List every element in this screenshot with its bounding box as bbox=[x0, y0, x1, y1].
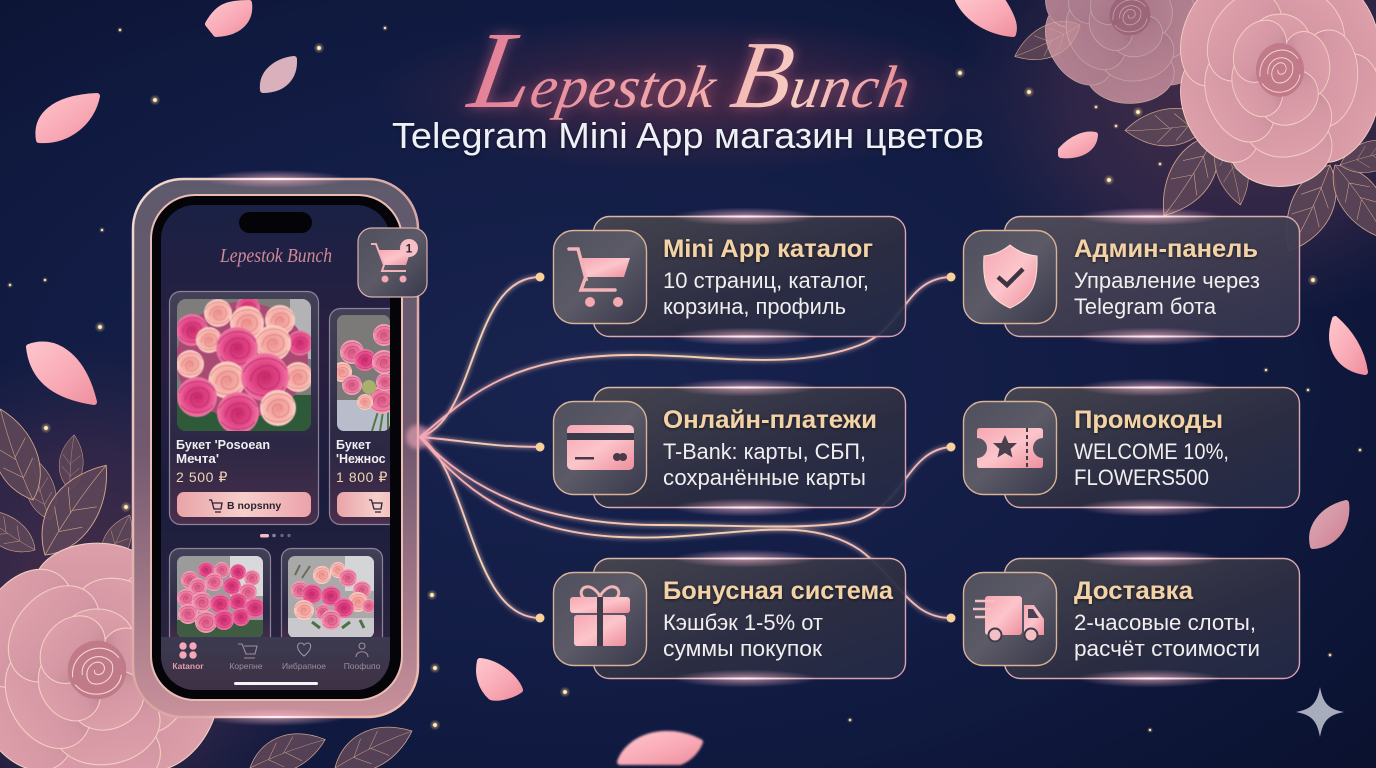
card: online payments bbox=[554, 378, 906, 516]
connector: promo codes bbox=[420, 437, 951, 527]
heading: Доставка bbox=[1074, 577, 1194, 605]
product card 2 bbox=[328, 308, 390, 526]
tab: profile: Поофuпо bbox=[344, 661, 381, 671]
bottom tab bar bbox=[161, 637, 390, 690]
product card 4 bbox=[282, 548, 382, 648]
subtitle: Telegram Mini App магазин цветов bbox=[392, 115, 984, 156]
phone body bbox=[151, 195, 402, 700]
tab: catalog: Кatanor bbox=[172, 661, 204, 671]
icon: delivery truck bbox=[973, 596, 1044, 642]
tab: profile bbox=[344, 643, 381, 671]
icon tile bbox=[964, 402, 1056, 494]
connectors bbox=[420, 277, 951, 618]
floating cart badge bbox=[358, 228, 427, 297]
connector: bonus system bbox=[420, 437, 540, 618]
product price 2: 1 800 ₽ bbox=[336, 469, 388, 485]
icon: cart bbox=[569, 249, 630, 307]
card: promo codes: FLOWERS500 bbox=[1074, 465, 1209, 490]
card: promo codes bbox=[964, 378, 1300, 516]
icon tile bbox=[964, 572, 1056, 666]
card: Mini App catalog bbox=[554, 208, 906, 346]
add to cart button 1: В nopsnny bbox=[227, 500, 281, 512]
card: delivery bbox=[964, 550, 1300, 688]
card: admin panel bbox=[964, 208, 1300, 346]
icon tile bbox=[554, 230, 646, 324]
card: bonus system bbox=[554, 550, 906, 688]
icon: ticket bbox=[977, 428, 1043, 468]
description: Кэшбэк 1-5% от bbox=[663, 610, 823, 635]
add to cart button 1 bbox=[177, 492, 311, 517]
app logo: Lepestok Bunch bbox=[219, 245, 332, 267]
product card 3 bbox=[170, 548, 270, 648]
icon: shield bbox=[984, 245, 1037, 308]
bouquet photo 1 bbox=[176, 296, 313, 434]
connector: Mini App catalog bbox=[420, 277, 540, 437]
phone glass frame bbox=[133, 179, 418, 717]
phone frame glows bbox=[203, 170, 347, 726]
heading: Онлайн-платежи bbox=[663, 406, 877, 434]
card: online payments: сохранённые карты bbox=[663, 465, 866, 490]
tab: cart bbox=[229, 644, 263, 671]
product price 1: 2 500 ₽ bbox=[176, 469, 228, 485]
connector: delivery bbox=[420, 437, 951, 618]
description: 2-часовые слоты, bbox=[1074, 610, 1256, 635]
phone screen bbox=[161, 205, 390, 690]
bouquet photo 2 bbox=[337, 315, 390, 431]
card: delivery: расчёт стоимости bbox=[1074, 636, 1260, 661]
heading: Бонусная система bbox=[663, 577, 894, 605]
heading: Mini App каталог bbox=[663, 235, 873, 263]
description: T-Bank: карты, СБП, bbox=[663, 439, 866, 464]
tab: favorites: Иибрапное bbox=[282, 661, 326, 671]
product card 2: 'Нежнос bbox=[336, 452, 386, 466]
product name 2: Букет bbox=[336, 438, 371, 452]
icon: gift bbox=[570, 587, 630, 646]
dynamic island bbox=[239, 212, 312, 233]
heading: Промокоды bbox=[1074, 406, 1223, 434]
add to cart button 2 bbox=[337, 492, 390, 517]
description: 10 страниц, каталог, bbox=[663, 268, 869, 293]
tab: catalog bbox=[172, 642, 204, 671]
card: bonus system: суммы покупок bbox=[663, 636, 822, 661]
icon tile bbox=[554, 572, 646, 666]
floating cart badge: 1 bbox=[406, 244, 413, 256]
product card 1: Мечта' bbox=[176, 452, 219, 466]
hub glow bbox=[406, 425, 430, 449]
description: WELCOME 10%, bbox=[1074, 439, 1229, 464]
connector: admin panel bbox=[420, 277, 951, 437]
tab: cart: Корепне bbox=[229, 661, 263, 671]
carousel dots bbox=[260, 534, 291, 538]
product name 1: Букет 'Posoean bbox=[176, 438, 270, 452]
connector nodes bbox=[536, 272, 956, 622]
heading: Админ-панель bbox=[1074, 235, 1258, 263]
decoration: top-right roses and leaves bbox=[1014, 0, 1376, 252]
description: Управление через bbox=[1074, 268, 1260, 293]
connector: payments bbox=[420, 437, 540, 447]
tab: favorites bbox=[282, 643, 326, 671]
card: admin panel: Telegram бота bbox=[1074, 294, 1217, 319]
icon tile bbox=[554, 402, 646, 494]
cart count bbox=[400, 239, 418, 257]
card: Mini App catalog: корзина, профиль bbox=[663, 294, 846, 319]
home indicator bbox=[234, 682, 318, 685]
cart icon bbox=[378, 250, 411, 265]
title: Lepestok Bunch bbox=[460, 9, 923, 131]
icon: corner sparkle bbox=[1296, 687, 1344, 737]
icon: bank card bbox=[567, 425, 634, 470]
phone mockup bbox=[133, 170, 430, 726]
icon tile bbox=[964, 230, 1056, 324]
product card 1 bbox=[170, 292, 318, 524]
